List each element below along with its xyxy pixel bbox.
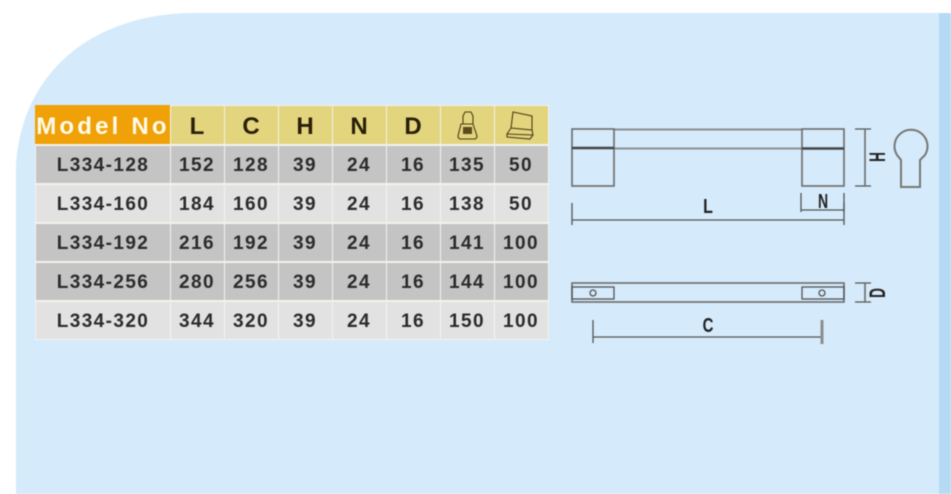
- row L334-256: 100: [503, 272, 539, 293]
- end profile of handle: [894, 130, 928, 187]
- dimension L: [572, 195, 844, 225]
- row L334-128: [36, 146, 548, 183]
- row L334-192: L334-192: [57, 233, 149, 254]
- row L334-160: 16: [401, 194, 425, 215]
- header: L: [171, 106, 224, 144]
- row L334-128: 50: [509, 155, 533, 176]
- header: D: D: [404, 113, 422, 140]
- header: L: L: [190, 113, 204, 140]
- row L334-160: 160: [233, 194, 269, 215]
- row L334-192: 16: [401, 233, 425, 254]
- row L334-192: 141: [449, 233, 485, 254]
- header icon: carton: [495, 106, 548, 144]
- row L334-192: 192: [233, 233, 269, 254]
- specification table: [35, 105, 549, 340]
- table header row: [35, 105, 548, 144]
- row L334-128: L334-128: [57, 155, 149, 176]
- header: C: [225, 106, 278, 144]
- dimension L: L: [703, 195, 713, 217]
- row L334-192: 39: [293, 233, 317, 254]
- row L334-128: 24: [347, 155, 371, 176]
- row L334-128: 39: [293, 155, 317, 176]
- header: Model No: Model No: [36, 113, 170, 140]
- row L334-320: 100: [503, 311, 539, 332]
- header icon: weight: [441, 106, 494, 144]
- dimension D: D: [865, 288, 890, 298]
- row L334-320: 150: [449, 311, 485, 332]
- header: Model No: [35, 105, 170, 144]
- dimension C: C: [703, 314, 714, 337]
- row L334-256: [36, 263, 548, 300]
- top view drawing of handle: [572, 283, 844, 302]
- row L334-256: 256: [233, 272, 269, 293]
- row L334-160: [36, 185, 548, 222]
- dimension H: H: [865, 152, 890, 162]
- header: C: C: [242, 113, 260, 140]
- row L334-320: 320: [233, 311, 269, 332]
- header: H: [279, 106, 332, 144]
- dimension D: [855, 283, 890, 302]
- row L334-256: 16: [401, 272, 425, 293]
- dimension N: [801, 189, 844, 213]
- row L334-160: 50: [509, 194, 533, 215]
- row L334-160: 138: [449, 194, 485, 215]
- header: D: [387, 106, 440, 144]
- row L334-192: [36, 224, 548, 261]
- row L334-128: 152: [179, 155, 215, 176]
- row L334-320: 344: [179, 311, 215, 332]
- row L334-128: 16: [401, 155, 425, 176]
- row L334-320: 16: [401, 311, 425, 332]
- row L334-160: 184: [179, 194, 215, 215]
- row L334-320: L334-320: [57, 311, 149, 332]
- row L334-320: 24: [347, 311, 371, 332]
- header: N: N: [350, 113, 368, 140]
- row L334-256: 39: [293, 272, 317, 293]
- row L334-320: 39: [293, 311, 317, 332]
- row L334-320: [36, 302, 548, 339]
- row L334-128: 128: [233, 155, 269, 176]
- right edge strip: [939, 13, 951, 494]
- front view drawing of handle: [572, 129, 844, 186]
- header: N: [333, 106, 386, 144]
- row L334-160: 24: [347, 194, 371, 215]
- row L334-192: 100: [503, 233, 539, 254]
- dimension N: N: [818, 189, 828, 213]
- row L334-192: 216: [179, 233, 215, 254]
- dimension H: [855, 129, 890, 186]
- row L334-160: 39: [293, 194, 317, 215]
- row L334-160: L334-160: [57, 194, 149, 215]
- row L334-128: 135: [449, 155, 485, 176]
- row L334-256: 280: [179, 272, 215, 293]
- header: H: H: [296, 113, 314, 140]
- dimension C: [593, 314, 822, 344]
- row L334-256: 144: [449, 272, 485, 293]
- row L334-256: L334-256: [57, 272, 149, 293]
- row L334-192: 24: [347, 233, 371, 254]
- row L334-256: 24: [347, 272, 371, 293]
